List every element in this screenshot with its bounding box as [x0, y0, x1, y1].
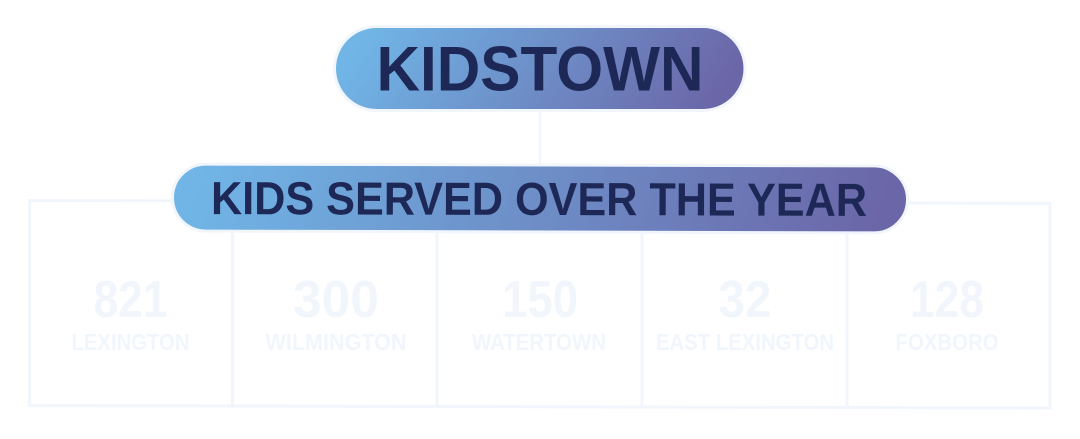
- title pill: Kidstown: KIDSTOWN: [376, 34, 704, 104]
- cell: Foxboro: FOXBORO: [896, 329, 998, 355]
- cell: Lexington: LEXINGTON: [72, 329, 190, 355]
- cell: Watertown: 150: [502, 271, 578, 329]
- cell: Foxboro: 128: [910, 271, 984, 329]
- cell: East Lexington: EAST LEXINGTON: [656, 329, 834, 355]
- title pill: Kidstown: [334, 26, 745, 110]
- cell: Watertown: [472, 271, 606, 355]
- cell: Lexington: [72, 271, 190, 355]
- cell: Wilmington: WILMINGTON: [266, 329, 406, 355]
- panel: locations grid: [30, 200, 1050, 408]
- cell: East Lexington: 32: [718, 271, 772, 329]
- cell: Wilmington: 300: [293, 271, 379, 329]
- cell: Watertown: WATERTOWN: [472, 329, 606, 355]
- cell: Wilmington: [266, 271, 406, 355]
- grid outline and dividers: [30, 200, 1050, 408]
- cell: Foxboro: [896, 271, 998, 355]
- cell: East Lexington: [656, 271, 834, 355]
- connector line: [539, 112, 541, 164]
- cell: Lexington: 821: [94, 271, 168, 329]
- subtitle pill: kids served over the year: KIDS SERVED OVER THE YEAR: [211, 172, 867, 226]
